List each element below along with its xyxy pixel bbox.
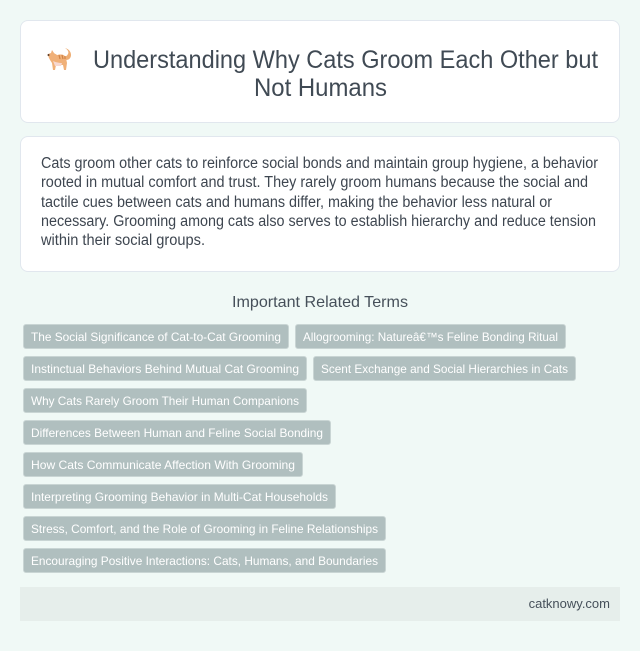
related terms tags: Encouraging Positive Interactions: Cats, Humans, and Boundaries [31, 554, 378, 568]
related terms tags: Interpreting Grooming Behavior in Multi-Cat Households [31, 490, 328, 504]
related terms tags: Allogrooming: Natureâ€™s Feline Bonding Ritual [303, 330, 558, 344]
description text: necessary. Grooming among cats also serves to establish hierarchy and reduce tension [41, 213, 596, 230]
icon: cat [48, 48, 71, 70]
description card [20, 136, 620, 272]
header card [20, 20, 620, 123]
related terms tags: Why Cats Rarely Groom Their Human Companions [31, 394, 299, 408]
description text: Cats groom other cats to reinforce social bonds and maintain group hygiene, a behavior [41, 155, 598, 172]
description text: within their social groups. [40, 232, 205, 249]
description text [40, 155, 598, 249]
title: Understanding Why Cats Groom Each Other but [93, 46, 598, 74]
title: Not Humans [254, 74, 387, 102]
related terms tags: Instinctual Behaviors Behind Mutual Cat Grooming [31, 362, 299, 376]
related terms tags: The Social Significance of Cat-to-Cat Grooming [31, 330, 281, 344]
related terms heading: Important Related Terms [232, 294, 408, 311]
description text: rooted in mutual comfort and trust. They rarely groom humans because the social and [41, 174, 588, 191]
related terms tags: Scent Exchange and Social Hierarchies in Cats [321, 362, 568, 376]
footer bar [20, 587, 620, 621]
description text: tactile cues between cats and humans differ, making the behavior less natural or [41, 194, 552, 211]
title [93, 46, 598, 102]
related terms tags: How Cats Communicate Affection With Grooming [31, 458, 295, 472]
related terms tags: Stress, Comfort, and the Role of Grooming in Feline Relationships [31, 522, 378, 536]
footer source text: catknowy.com [529, 596, 610, 611]
related terms tags: Differences Between Human and Feline Social Bonding [31, 426, 323, 440]
